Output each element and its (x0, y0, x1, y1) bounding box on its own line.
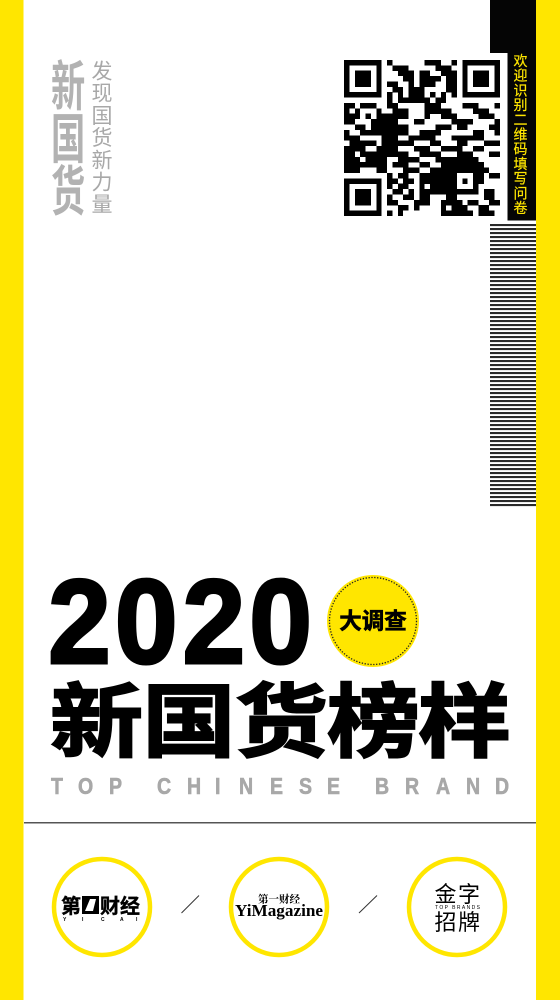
year: 2020: 2020 (48, 555, 312, 689)
subtitle: TOP CHINESE BRAND: TOP CHINESE BRAND (51, 774, 509, 799)
slash separator (359, 896, 377, 913)
tagline: 发现国货新力量: 发现国货新力量 (92, 60, 112, 217)
right yellow bar (536, 0, 560, 1000)
QR code (344, 60, 500, 216)
survey prompt: vertical yellow text: 欢迎识别二维码填写问卷 (514, 53, 528, 216)
logo circle: 第一财经 YICAI: 第 (61, 895, 81, 918)
main title: 新国货榜样: 新国货榜样 (50, 678, 511, 768)
logo circle: 金字招牌: TOP BRANDS (435, 905, 481, 911)
logo circle: 金字招牌: 招牌 (434, 910, 480, 935)
logo circle: YiMagazine: 第一财经 (258, 892, 300, 906)
logo circle: YiMagazine: YiMagazine (235, 901, 323, 920)
logo circle: YiMagazine (231, 859, 327, 955)
logo circle: 金字招牌 (409, 859, 505, 955)
logo circle: 金字招牌: 金字 (434, 882, 480, 907)
divider line (24, 822, 536, 824)
logo: 新国货 stacked wordmark: 新国货 (51, 57, 85, 223)
logo circle: 第一财经 YICAI: YICAI (63, 917, 138, 923)
badge: 大调查 (327, 575, 419, 667)
black tab behind survey prompt (490, 0, 536, 220)
logo circle: 第一财经 YICAI: 财经 (100, 895, 140, 918)
barcode stripes (490, 224, 536, 507)
badge: 大调查: 大调查 (339, 609, 407, 634)
slash separator (182, 896, 199, 913)
logo circle: 第一财经 YICAI (54, 859, 150, 955)
left yellow bar (0, 0, 24, 1000)
